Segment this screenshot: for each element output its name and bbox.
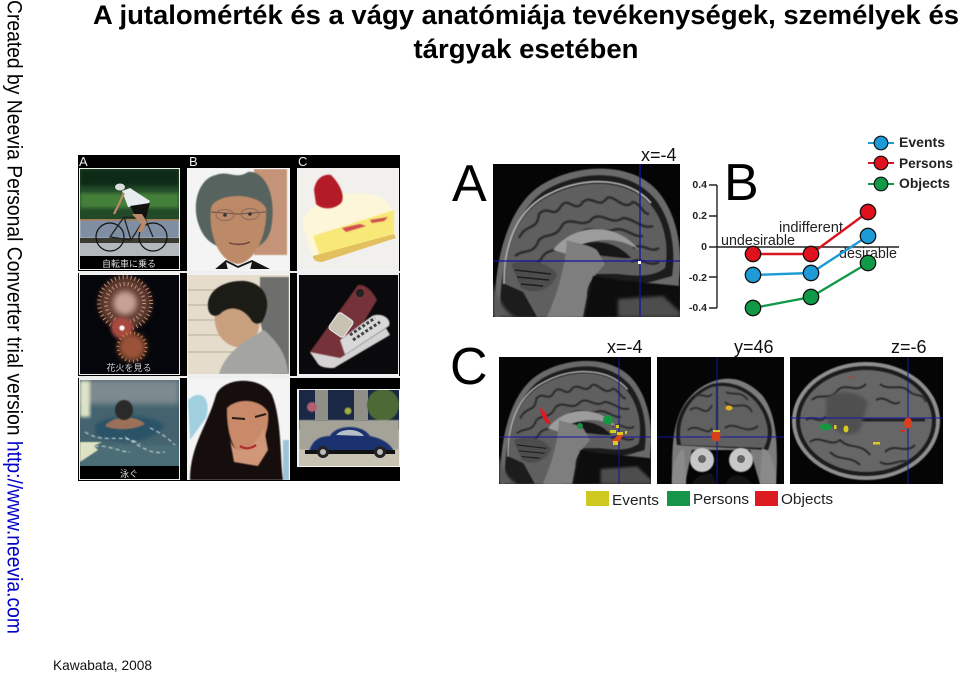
panel C label: C [450,338,488,396]
panel B: line chart [689,179,899,316]
panel C legend [586,491,833,509]
series: persons [745,204,876,262]
title: A jutalomérték és a vágy anatómiája tevékenységek, személyek és [93,0,959,30]
title: tárgyak esetében [414,34,638,64]
photo: young man portrait [187,273,290,376]
panel B label: B [724,154,759,212]
category labels: undesirable [721,233,795,249]
panel B legend [868,134,953,191]
y axis tick labels: 0 [701,241,707,253]
panel C legend: Persons [693,491,749,508]
caption: cycling: 自転車に乗る [102,258,156,269]
column label B: B [189,154,198,169]
grid background [78,155,400,481]
series: objects [745,255,876,316]
photo: cyclist [79,168,180,270]
vertical converter watermark: Created by Neevia Personal Converter trial version http://www.neevia.com [2,0,26,634]
panel C coordinate labels [607,337,927,357]
panel C: axial scan [790,357,943,484]
panel B legend: Persons [899,155,953,171]
caption: swimming: 泳ぐ [120,468,138,479]
photo: fireworks [79,273,180,375]
y axis tick labels [689,179,707,314]
y axis tick labels: 0.4 [692,179,707,191]
panel A label: A [452,155,487,213]
caption: fireworks: 花火を見る [106,362,152,373]
panel A: sagittal brain scan [493,164,680,317]
panel B legend: Events [899,134,945,150]
panel C coordinate labels: z=-6 [891,337,927,357]
y axis tick labels: 0.2 [692,210,707,222]
panel B legend: Objects [899,175,950,191]
photo: flip phone [297,273,399,376]
photo: older man portrait [187,168,290,271]
panel C legend: Objects [781,491,833,508]
series: events [745,228,876,283]
panel C coordinate labels: x=-4 [607,337,643,357]
y axis tick labels: -0.4 [689,302,707,314]
photo: blue beetle car [297,389,400,467]
photo grid panel [78,154,400,481]
title [93,0,959,64]
panel C coordinate labels: y=46 [734,337,774,357]
category labels [721,220,897,262]
photo: young woman portrait [187,378,290,480]
category labels: indifferent [779,220,843,236]
photo: strawberry cake [297,168,399,271]
panel A coordinate label: x=-4 [641,145,677,165]
y axis [709,185,899,308]
column label A: A [79,154,88,169]
y axis tick labels: -0.2 [689,272,707,284]
category labels: desirable [839,246,897,262]
source credit: Kawabata, 2008 [53,657,152,673]
panel C legend: Events [612,492,659,509]
photo: swimmer [79,378,180,480]
panel C: sagittal scan [499,357,651,484]
column label C: C [298,154,307,169]
panel C: coronal scan [657,357,784,484]
